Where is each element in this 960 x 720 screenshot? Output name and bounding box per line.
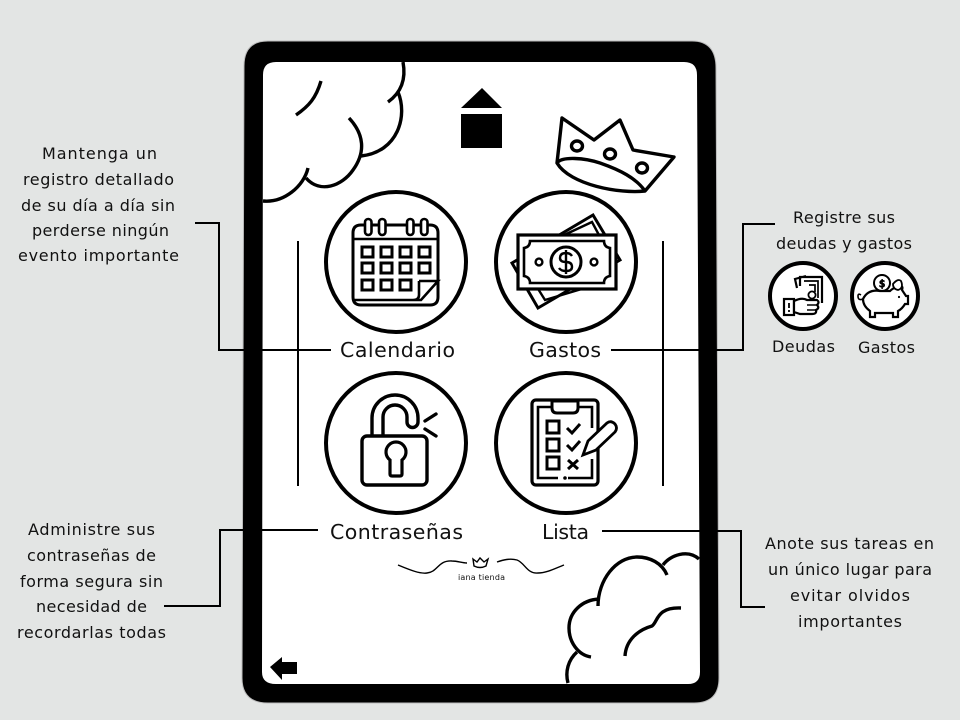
text: calendar description bbox=[18, 144, 179, 265]
text: passwords description bbox=[17, 520, 166, 642]
text: passwords description: necesidad de bbox=[36, 597, 147, 616]
text: calendar description: evento importante bbox=[18, 246, 179, 265]
icon: piggy bank bbox=[852, 263, 918, 329]
icon: bottom-right cloud bbox=[567, 554, 699, 683]
text: calendar description: de su día a día sin bbox=[21, 196, 175, 215]
text: passwords description: forma segura sin bbox=[20, 572, 163, 591]
label: Calendario: Calendario bbox=[340, 338, 455, 362]
connector: calendar bbox=[195, 223, 331, 350]
icon: calendar bbox=[326, 192, 466, 332]
text: calendar description: registro detallado bbox=[23, 170, 174, 189]
tablet device bbox=[242, 41, 719, 703]
icon: top-left cloud bbox=[263, 62, 404, 201]
icon: money bbox=[496, 192, 636, 332]
text: list description: evitar olvidos bbox=[790, 586, 910, 605]
label: Gastos: Gastos bbox=[529, 338, 601, 362]
connector: list bbox=[602, 531, 765, 607]
icon: crown bbox=[557, 118, 674, 192]
text: expenses description bbox=[776, 208, 912, 253]
text: list description: importantes bbox=[798, 612, 902, 631]
connector: passwords bbox=[164, 530, 318, 606]
label: Gastos small: Gastos bbox=[858, 338, 915, 357]
label: Lista: Lista bbox=[542, 520, 589, 544]
text: passwords description: recordarlas todas bbox=[17, 623, 166, 642]
left vertical divider bbox=[297, 241, 299, 486]
icon: padlock bbox=[326, 373, 466, 513]
text: expenses description: deudas y gastos bbox=[776, 234, 912, 253]
icon: back arrow bbox=[270, 657, 297, 680]
icon: home bbox=[461, 88, 502, 148]
text: calendar description: perderse ningún bbox=[32, 221, 169, 240]
icon: debts bbox=[770, 263, 836, 329]
text: calendar description: Mantenga un bbox=[42, 144, 157, 163]
label: Contraseñas: Contraseñas bbox=[330, 520, 463, 544]
label: Deudas: Deudas bbox=[772, 337, 835, 356]
connector: expenses bbox=[611, 224, 775, 350]
text: list description bbox=[765, 534, 934, 631]
icon: checklist bbox=[496, 373, 636, 513]
text: list description: un único lugar para bbox=[768, 560, 932, 579]
icon: piggy bank: $ bbox=[879, 279, 885, 290]
text: list description: Anote sus tareas en bbox=[765, 534, 934, 553]
right vertical divider bbox=[662, 241, 664, 486]
logo: iana tienda bbox=[398, 558, 564, 582]
text: expenses description: Registre sus bbox=[793, 208, 895, 227]
text: passwords description: Administre sus bbox=[28, 520, 155, 539]
text: passwords description: contraseñas de bbox=[27, 546, 156, 565]
logo: iana tienda: iana tienda bbox=[458, 573, 505, 582]
